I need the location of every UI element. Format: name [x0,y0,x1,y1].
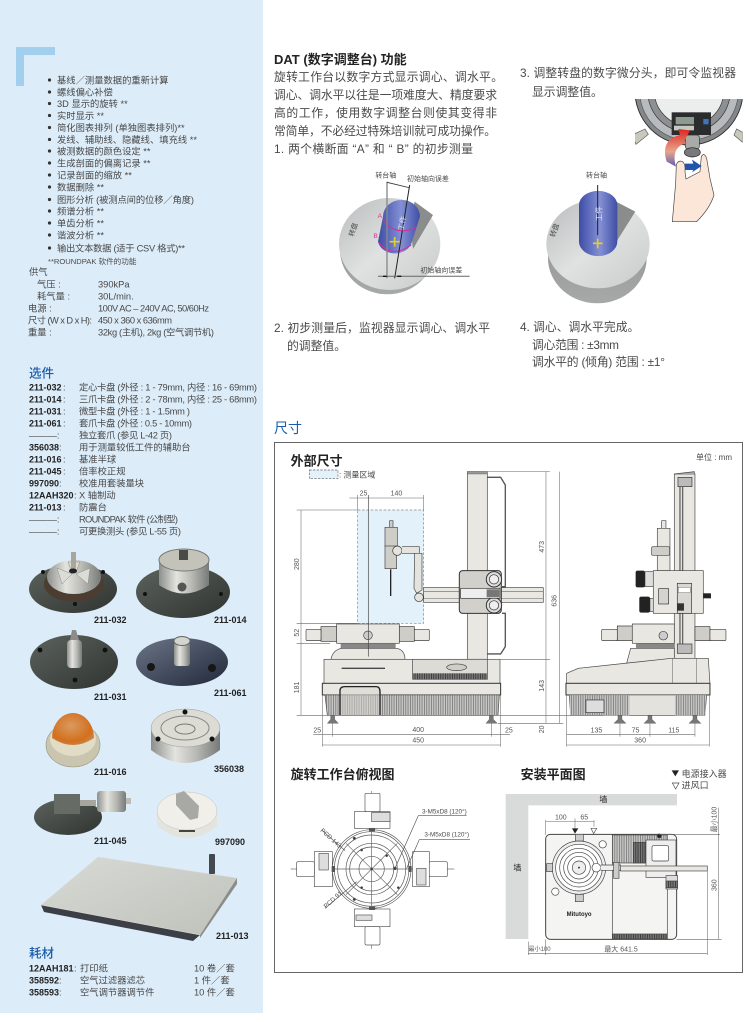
dimension lines and values: 140 [391,490,402,497]
options list: 微型卡盘 (外径 : 1 - 1.5mm ) [79,406,190,416]
legend: power inlet and air inlet: 进风口 [682,780,709,790]
dimension lines and values: 25 [360,490,368,497]
legend: power inlet and air inlet [672,768,727,790]
options list: : [63,502,66,512]
options list: : [59,442,62,452]
label: 3-M5xD8 upper: 3-M5xD8 (120°) [422,808,467,816]
footnote: ROUNDPAK: **ROUNDPAK 软件的功能 [48,256,137,266]
text block: DAT description and step 1: 调心、调水平以往是一项难度大、精度要求 [274,88,497,102]
options list: : [63,454,66,464]
heading: DAT function: DAT (数字调整台) 功能 [274,52,407,67]
consumables list: : [59,988,62,998]
photo: 211-031 micro chuck [30,630,118,689]
options list: 356038 [29,442,59,452]
options list: 211-016 [29,454,62,464]
text block: step 3: 显示调整值。 [532,85,603,99]
feature bullet list: 频谱分析 ** [57,206,104,216]
options list: : [63,418,66,428]
dimension lines and values: 115 [668,727,680,734]
specification list: 尺寸 (W x D x H): [28,314,92,326]
specification list: 100V AC – 240V AC, 50/60Hz [98,304,209,314]
text block: step 4: 4. 调心、调水平完成。 [520,320,639,334]
label: PCD 91: PCD 91 [323,890,344,910]
label: 211-045: 211-045 [94,836,127,846]
options list: 211-014 [29,394,62,404]
diagram: initial measurement: A [378,213,383,220]
icon: blue corner bracket [16,47,55,86]
text block: step 4 [520,320,665,369]
consumables list: 358592 [29,976,59,986]
dimension lines and values: 473 [539,541,546,553]
diagram: completed adjustment [546,171,650,303]
consumables list: 358593 [29,988,59,998]
dimension lines and values: 最小100 [529,945,551,953]
options list: 211-045 [29,466,62,476]
specification list: 390kPa [98,280,130,290]
label: wall left: 墙 [513,862,521,872]
feature bullet list: 3D 显示的旋转 ** [57,98,128,109]
feature bullet list: 简化图表排列 (单独图表排列)** [57,122,185,133]
options list: 用于测量较低工件的辅助台 [79,442,191,452]
consumables list [29,962,235,998]
dimension lines and values: 280 [294,558,301,570]
feature bullet list: 螺线偏心补偿 [57,86,113,98]
diagram: initial measurement: 转盘 [347,222,360,238]
diagram: completed adjustment: 转盘 [548,222,561,238]
label: 211-061: 211-061 [214,688,247,698]
dimension lines and values: 143 [539,680,546,692]
dimension lines and values: 181 [294,682,301,693]
dimension lines and values [528,807,722,955]
text block: DAT description and step 1: 高的工作，使用数字调整台则使其变得非 [274,106,497,120]
options list: : [59,478,62,488]
dimension lines and values: 75 [632,727,640,734]
options list: 997090 [29,478,59,488]
diagram: initial measurement: 初始轴向误差 [420,266,462,275]
logo: Mitutoyo [567,912,592,918]
options list: 定心卡盘 (外径 : 1 - 79mm, 内径 : 16 - 69mm) [79,382,257,392]
dimension lines and values: 400 [412,727,424,734]
dimension lines and values: 最小100 [710,807,719,832]
diagram: installation plan [506,767,727,955]
photo: 211-016 reference hemisphere [46,713,100,767]
photo: 211-032 centering chuck [29,552,117,613]
front view machine [306,472,543,723]
legend: power inlet and air inlet: 电源接入器 [682,768,727,779]
panel: left sidebar background [0,0,263,1013]
dimension lines and values: 25 [313,727,321,734]
dimension lines and values: 65 [580,814,588,821]
options list: 211-031 [29,406,62,416]
photo: 211-061 collet chuck [136,636,228,686]
text block: step 2: 2. 初步测量后，监视器显示调心、调水平 [274,321,490,335]
consumables list: 10 卷／套 [194,962,235,974]
specification list: 耗气量 : [37,290,70,302]
options list: 211-061 [29,418,62,428]
options list: 三爪卡盘 (外径 : 2 - 78mm, 内径 : 25 - 68mm) [79,394,257,404]
dimension lines and values: 25 [505,727,513,734]
label: 356038: 356038 [214,764,244,774]
options list: : [63,382,66,392]
photo: 211-014 three-jaw chuck [136,549,230,618]
specification list: 电源 : [28,302,52,314]
options list: 可更换测头 (参见 L-55 页) [79,526,181,536]
legend: measuring area [309,470,375,480]
diagram: initial measurement: B [373,233,378,240]
consumables list: 10 件／套 [194,986,235,998]
heading: installation plan: 安装平面图 [521,767,586,782]
feature bullet list: 被测数据的颜色设定 ** [57,146,151,156]
text block: DAT description and step 1 [274,70,503,156]
photo: 997090 gage block set [157,791,217,838]
options list: 倍率校正规 [79,466,126,476]
options list: ———: [29,526,59,536]
text block: DAT description and step 1: 常简单，不必经过特殊培训就可成功操作。 [274,124,496,138]
options list: 211-032 [29,382,62,392]
heading: top view: 旋转工作台俯视图 [291,767,395,782]
feature bullet list: 谐波分析 ** [57,230,104,240]
options list: : [74,490,77,500]
dimension lines and values: 最大 641.5 [604,944,638,953]
specification list: 450 x 360 x 636mm [98,316,172,326]
top view drawing [291,791,470,949]
diagram: initial measurement [339,170,470,294]
options list: ———: [29,514,59,524]
options list: 独立套爪 (参见 L-42 页) [79,430,172,440]
legend: measuring area: : 测量区域 [339,470,375,480]
text block: step 4: 调心范围 : ±3mm [532,338,619,352]
photo: 356038 auxiliary table [151,709,220,763]
label: 997090: 997090 [215,837,245,847]
text block: step 3 [520,66,736,99]
text block: DAT description and step 1: 1. 两个横断面 “A” 和 “ B” 的初步测量 [274,142,473,156]
feature bullet list: 数据删除 ** [57,182,104,192]
options list: : [63,394,66,404]
consumables list: 12AAH181 [29,964,74,974]
heading: consumables: 耗材 [29,946,55,960]
text block: step 3: 3. 调整转盘的数字微分头，即可令监视器 [520,66,736,80]
consumables list: : [74,964,77,974]
consumables list: 空气调节器调节件 [80,986,154,998]
photo: adjusting the digital micrometer by hand [635,99,743,222]
dimension lines and values: 450 [412,738,424,745]
specification list: 气压 : [37,278,61,290]
options list: ROUNDPAK 软件 (公制型) [79,514,178,524]
photo: 211-045 magnification gage [34,791,131,835]
diagram: initial measurement: 转台轴 [375,170,396,179]
dimension lines and values: 360 [712,879,719,891]
options list: 12AAH320 [29,490,74,500]
consumables list: 1 件／套 [194,974,230,986]
feature bullet list: 记录剖面的缩放 ** [57,170,132,180]
feature bullet list: 实时显示 ** [57,110,104,121]
text block: step 2: 的调整值。 [287,339,346,353]
label: 211-031: 211-031 [94,692,127,702]
label: 211-032: 211-032 [94,615,127,625]
feature bullet list: 发线、辅助线、隐藏线、填充线 ** [57,134,197,145]
diagram: rotary table top view [291,767,470,949]
feature bullet list: 基线／测量数据的重新计算 [57,74,169,86]
options list: 防震台 [79,502,107,512]
specification list: 供气 [29,266,48,277]
feature bullet list: 生成剖面的偏离记录 ** [57,158,151,168]
label: unit: 单位 : mm [696,452,732,462]
label: PCD 143: PCD 143 [319,827,343,850]
diagram: initial measurement: 初始轴向误差 [407,174,449,183]
side view machine [566,472,726,723]
photo: 211-013 vibration isolation table [41,854,237,941]
label: 211-013: 211-013 [216,931,249,941]
dimension lines and values: 360 [634,738,646,745]
label: 3-M5xD8 lower: 3-M5xD8 (120°) [424,831,469,839]
label: wall top: 墙 [599,794,607,804]
options list: ———: [29,430,59,440]
dimension lines and values: 135 [591,727,602,734]
label: 211-016: 211-016 [94,767,127,777]
diagram: initial measurement: 工件 [396,215,408,231]
text block: step 4: 调水平的 (倾角) 范围 : ±1° [532,355,665,369]
feature bullet list: 单齿分析 ** [57,218,104,228]
feature bullet list: 图形分析 (被测点间的位移／角度) [57,194,194,205]
specification list [28,266,214,338]
label: 211-014: 211-014 [214,615,247,625]
plan drawing [546,834,707,939]
diagram: external dimensions (front and side views) [291,453,726,747]
measuring area [358,510,424,623]
heading: options: 选件 [29,366,54,380]
dimension lines and values: 20 [539,725,546,733]
dimension lines and values [294,472,709,747]
feature bullet list [48,74,197,254]
options list: X 轴制动 [79,490,116,500]
dimension lines and values: 100 [555,814,567,821]
wall [506,794,677,939]
consumables list: : [59,976,62,986]
options list: 校准用套装量块 [79,478,144,488]
specification list: 32kg (主机), 2kg (空气调节机) [98,326,214,338]
diagram: completed adjustment: 工件 [595,206,604,221]
options list: : [63,406,66,416]
specification list: 30L/min. [98,292,134,302]
consumables list: 空气过滤器滤芯 [80,974,145,986]
options list [29,382,257,536]
specification list: 重量 : [28,326,52,338]
options list: 套爪卡盘 (外径 : 0.5 - 10mm) [79,418,192,428]
panel: dimensions frame [274,442,742,972]
options list: : [63,466,66,476]
consumables list: 打印纸 [80,962,108,974]
feature bullet list: 输出文本数据 (适于 CSV 格式)** [57,242,185,254]
dimension lines and values: 52 [294,629,301,637]
options list: 基准半球 [79,454,117,464]
text block: DAT description and step 1: 旋转工作台以数字方式显示调心、调水平。 [274,70,503,84]
heading: dimensions: 尺寸 [274,420,302,436]
dimension lines and values: 636 [552,595,559,607]
heading: external dimensions: 外部尺寸 [291,453,343,468]
text block: step 2 [274,321,490,353]
diagram: completed adjustment: 转台轴 [586,171,607,180]
options list: 211-013 [29,502,62,512]
